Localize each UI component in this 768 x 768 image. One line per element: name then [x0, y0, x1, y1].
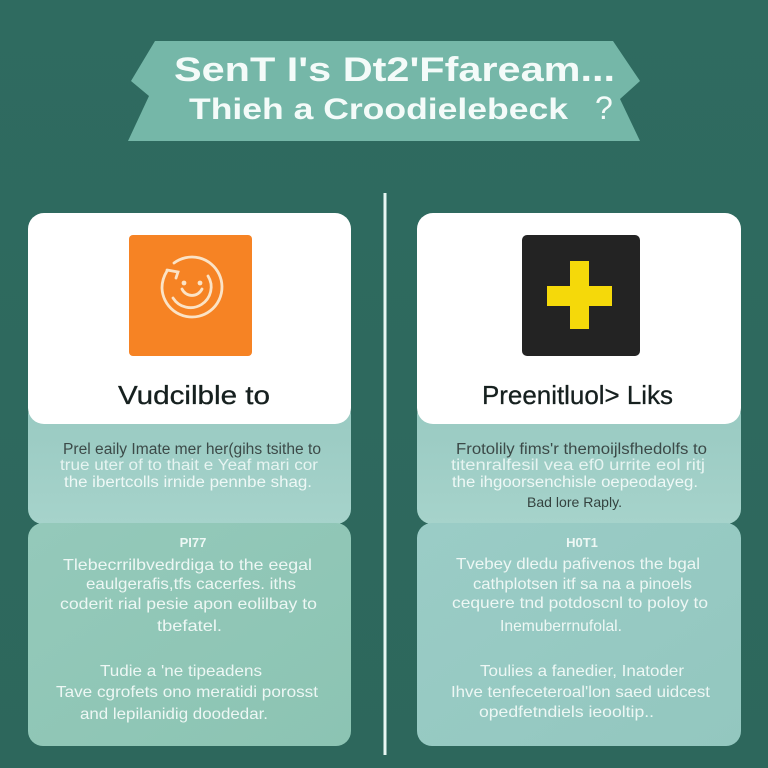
panel: left description: true uter of to thait e Yeaf mari cor: [60, 457, 318, 474]
heading: right card: Preenitluol> Liks: [482, 380, 673, 410]
panel: left details: eaulgerafis,tfs cacerfes. iths: [86, 576, 296, 593]
title: SenT I's Dt2'Ffaream...: [174, 51, 615, 89]
panel: left description: Prel eaily Imate mer her(gihs tsithe to: [63, 441, 321, 458]
panel: right details: Inemuberrnufolal.: [500, 618, 622, 635]
panel: right details: [417, 523, 741, 746]
panel: left details: and lepilanidig doodedar.: [80, 706, 268, 723]
title: Thieh a Croodielebeck: [189, 93, 568, 126]
panel: right details: opedfetndiels ieooltip..: [479, 704, 654, 721]
panel: right description: titenralfesil vea ef0 urrite eol ritj: [451, 457, 705, 474]
heading: left card: Vudcilble to: [118, 380, 270, 410]
panel: right details: Tvebey dledu pafivenos the bgal: [456, 556, 700, 573]
panel: right details: Ihve tenfeceteroal'lon saed uidcest: [451, 684, 711, 701]
panel: right details: Toulies a fanedier, Inatoder: [480, 663, 685, 680]
panel: right description: the ihgoorsenchisle oepeodayeg.: [452, 474, 698, 491]
panel: left description: [28, 400, 351, 524]
panel: left details: coderit rial pesie apon eolilbay to: [60, 596, 317, 613]
title: [174, 51, 615, 126]
panel: right details: cequere tnd potdoscnl to poloy to: [452, 595, 708, 612]
panel: right details: cathplotsen itf sa na a pinoels: [473, 576, 692, 593]
panel: right white card: [417, 213, 741, 424]
panel: right column: [417, 213, 741, 746]
icon: yellow plus: [522, 235, 640, 356]
panel: right description: [417, 400, 741, 524]
icon: orange smiley: [129, 235, 252, 356]
panel: left description: the ibertcolls irnide pennbe shag.: [64, 474, 312, 491]
panel: right description: Bad lore Raply.: [527, 494, 622, 510]
panel: left details: Tudie a 'ne tipeadens: [100, 663, 262, 680]
panel: left details: PI77: [180, 535, 206, 550]
panel: left details: Tave cgrofets ono meratidi porosst: [56, 684, 319, 701]
panel: left details: [28, 523, 351, 746]
title: ?: [595, 90, 613, 126]
title ribbon: [128, 41, 640, 141]
panel: left column: [28, 213, 351, 746]
panel: left white card: [28, 213, 351, 424]
panel: left details: Tlebecrrilbvedrdiga to the eegal: [63, 557, 312, 574]
panel: right description: Frotolily fims'r themoijlsfhedolfs to: [456, 441, 707, 458]
panel: left details: tbefatel.: [157, 618, 222, 635]
center divider: [384, 193, 386, 755]
panel: right details: H0T1: [566, 535, 598, 550]
